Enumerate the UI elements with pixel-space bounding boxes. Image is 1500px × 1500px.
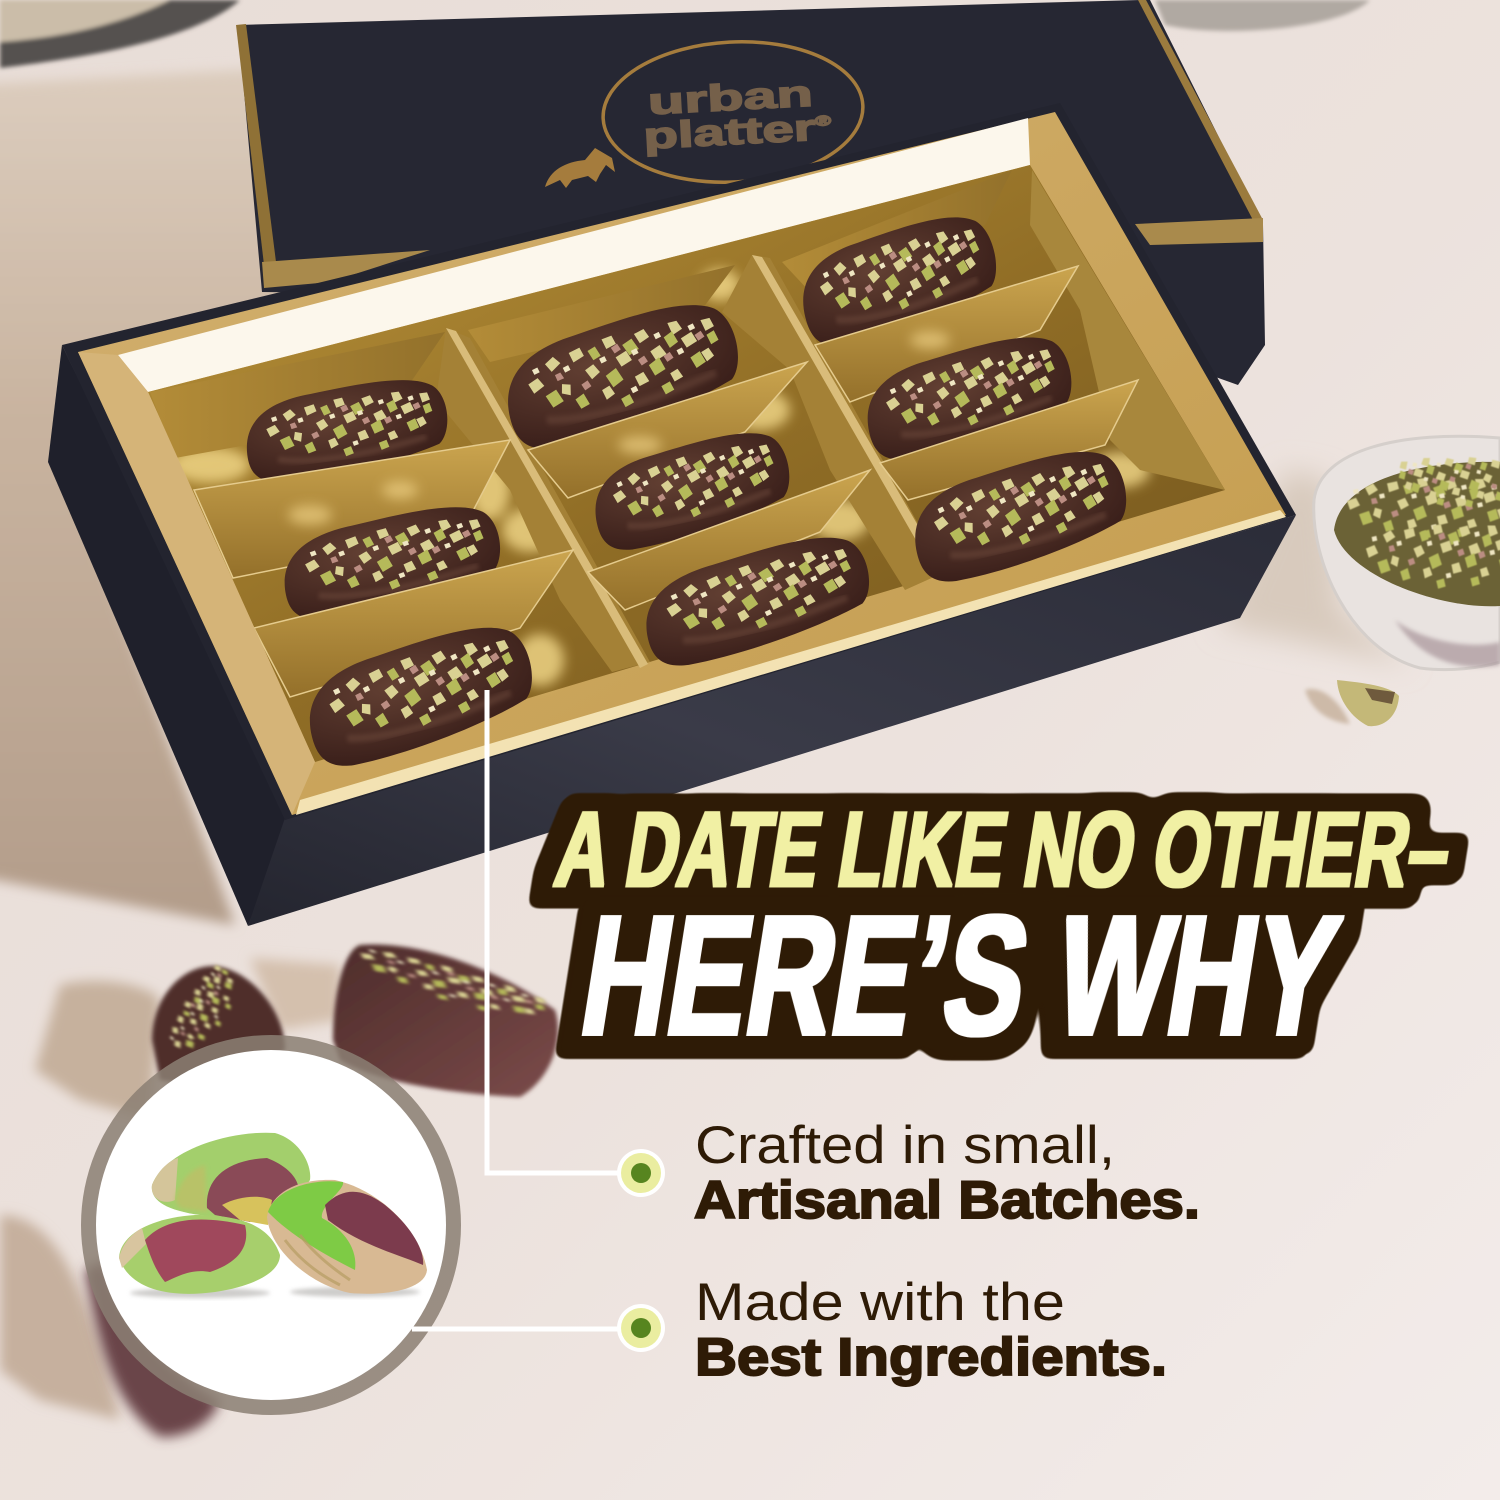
box left face xyxy=(48,345,290,926)
logo: urban platter xyxy=(600,35,866,189)
text: Made with the xyxy=(695,1273,1065,1332)
bullet: best ingredients xyxy=(617,1273,1167,1387)
logo: urban platter: platter xyxy=(642,110,757,157)
text: Artisanal Batches. xyxy=(694,1171,1200,1230)
left rim bevel xyxy=(78,352,315,815)
shadow beside bowl xyxy=(1220,470,1410,665)
pistachio group xyxy=(119,1133,427,1298)
text: Best Ingredients. xyxy=(695,1328,1167,1387)
blurred plate: top left xyxy=(0,0,240,68)
date 9 xyxy=(902,441,1137,589)
date 7 xyxy=(296,616,544,774)
date 2 xyxy=(493,293,751,457)
box shadow on table xyxy=(0,65,330,925)
date 6 xyxy=(856,328,1081,466)
box rim xyxy=(62,103,1296,820)
icon: elephant xyxy=(545,148,615,188)
connector line: best ingredients xyxy=(412,1326,625,1332)
logo: urban platter: ® xyxy=(815,112,832,129)
text: Crafted in small, xyxy=(695,1116,1115,1175)
flap highlights: first row xyxy=(288,331,950,525)
white back wall xyxy=(118,118,1030,392)
gold flaps: second row xyxy=(254,380,1138,697)
date 1 xyxy=(240,374,453,486)
date 3 xyxy=(790,207,1007,353)
small pistachio xyxy=(1305,680,1399,726)
text xyxy=(695,1273,1167,1387)
bullet: artisanal batches xyxy=(617,1116,1200,1230)
bright foil patches xyxy=(170,269,1150,686)
tray floor xyxy=(148,165,1225,762)
date 5 xyxy=(585,424,799,556)
box lid xyxy=(236,0,1265,385)
date 4 xyxy=(276,499,507,625)
bowl of chopped pistachios xyxy=(1314,436,1500,670)
date 8 xyxy=(634,527,880,673)
icon: green dot xyxy=(617,1304,665,1352)
connector line: artisanal batches xyxy=(487,690,625,1173)
gold flaps: first row xyxy=(194,266,1078,578)
back walls xyxy=(150,170,1012,458)
long dividers xyxy=(436,170,1225,672)
text xyxy=(694,1116,1200,1230)
title xyxy=(548,790,1459,1071)
foreground blurred dates xyxy=(35,941,558,1437)
pistachio circle callout xyxy=(81,1035,461,1415)
blurred plate: top right xyxy=(1155,0,1370,31)
box front face xyxy=(248,515,1296,926)
logo: urban platter: urban xyxy=(647,73,814,122)
gift box with dates xyxy=(48,103,1296,926)
icon: green dot xyxy=(617,1149,665,1197)
lower shadow near foreground date xyxy=(0,1215,120,1420)
gold tray rim xyxy=(78,112,1286,815)
